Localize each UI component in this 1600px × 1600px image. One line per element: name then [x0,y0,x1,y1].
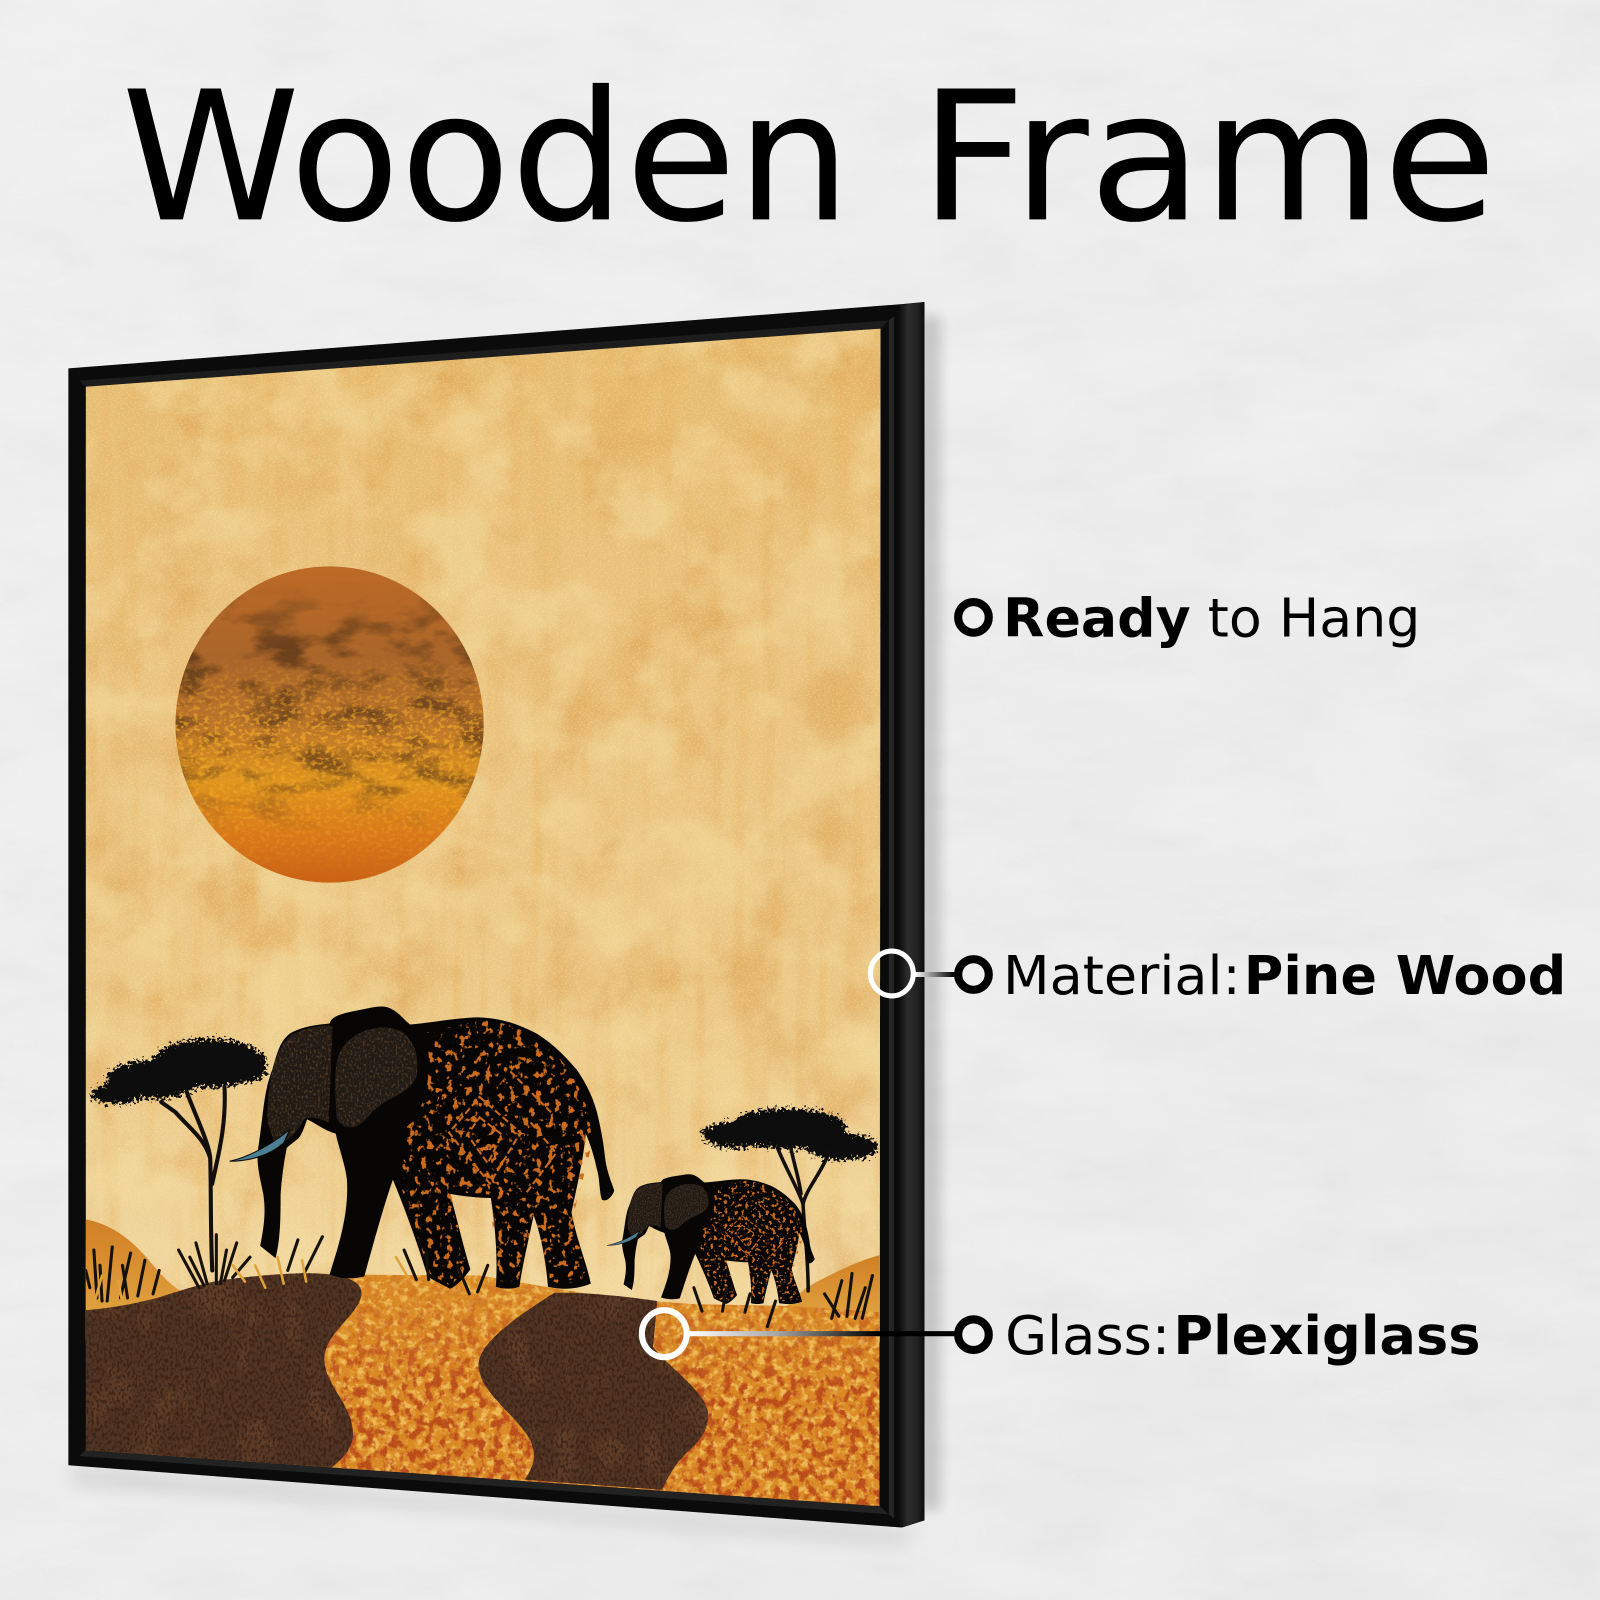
marker dot: ready to hang [958,602,989,633]
label: material: Material:Pine Wood [1003,945,1566,1007]
painting: acacia tree right [702,1108,879,1291]
painting: mother elephant [230,1006,614,1291]
painting: orange sun [173,564,486,885]
callout: glass plexiglass [642,1305,1481,1367]
frame inner bevel [80,320,889,387]
label: ready to hang: Ready to Hang [1003,588,1420,650]
painting: grass tufts [86,1235,872,1327]
title: Wooden [121,53,851,262]
connector line: glass [689,1331,959,1336]
painting: acacia tree left [91,1039,267,1270]
marker dot: material [958,959,989,990]
callout: material pine wood [870,945,1566,1007]
frame shadow on wall [71,316,941,1543]
callout: ready to hang [958,588,1420,650]
painting [82,321,888,1515]
black picture frame [68,302,924,1528]
painting: orange ground [82,1265,888,1515]
title [121,53,1497,262]
title: Frame [919,53,1497,262]
label: glass: Glass:Plexiglass [1005,1305,1481,1367]
painting: textured sky [82,321,888,1342]
frame side face [899,302,924,1528]
connector line: material [914,972,959,977]
white ring on painting [642,1310,687,1357]
painting: brown winding paths [86,1273,708,1490]
painting: distant hills [86,1219,880,1316]
painting: baby elephant [607,1174,815,1305]
white ring on frame [870,951,913,996]
marker dot: glass [958,1319,989,1350]
